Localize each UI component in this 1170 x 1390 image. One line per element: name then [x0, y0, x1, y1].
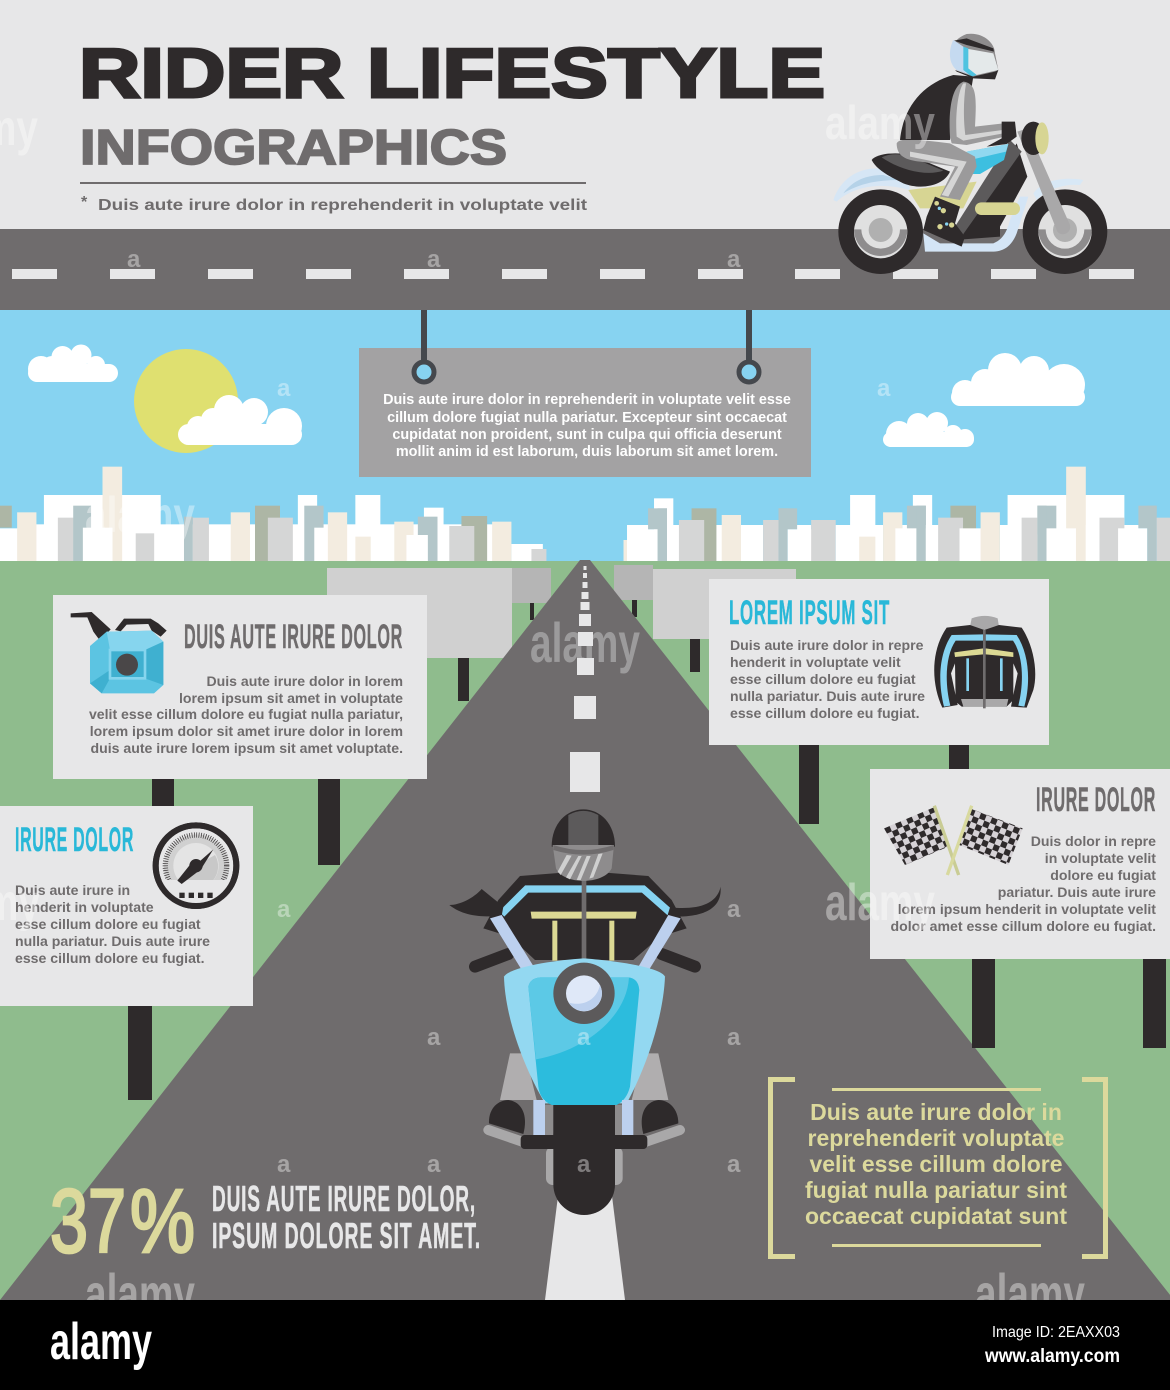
icon: side view motorcycle rider	[833, 34, 1107, 274]
header rule	[80, 182, 586, 184]
icon: cloud by sun	[178, 395, 302, 445]
post: billboard fuel	[152, 779, 340, 865]
text: gauge: esse cillum dolore eu fugiat	[15, 916, 201, 932]
stat: 37 percent: 37	[50, 1172, 126, 1272]
watermarks: a	[727, 1024, 741, 1051]
panel: fuel: DUIS AUTE IRURE DOLOR	[184, 618, 403, 656]
watermarks: a	[877, 375, 891, 402]
text: jacket: esse cillum dolore eu fugiat.	[730, 705, 920, 721]
watermarks: a	[727, 246, 741, 273]
text: flags: dolore eu fugiat	[1050, 867, 1156, 883]
city skyline right	[624, 467, 1170, 561]
watermarks: a	[427, 246, 441, 273]
title: RIDER LIFESTYLE	[79, 34, 825, 112]
watermarks: alamy	[530, 611, 640, 674]
post: billboard gauge	[128, 1006, 152, 1100]
callout: bracket quote	[770, 1080, 1106, 1256]
text: gauge: esse cillum dolore eu fugiat.	[15, 950, 205, 966]
watermarks: alamy	[975, 1262, 1085, 1325]
sky	[0, 310, 1170, 562]
text: gauge: nulla pariatur. Duis aute irure	[15, 933, 210, 949]
stat caption: IPSUM DOLORE SIT AMET.	[212, 1215, 481, 1256]
stat: 37 percent	[50, 1172, 195, 1272]
watermarks: a	[277, 1151, 291, 1178]
hanging sign: mollit anim id est laborum, duis laborum sit amet lorem.	[396, 444, 778, 460]
text: flags: lorem ipsum henderit in voluptate velit	[898, 901, 1156, 917]
hanging sign: cupidatat non proident, sunt in culpa qui officia deserunt	[392, 427, 782, 443]
callout: bracket quote: Duis aute irure dolor in	[810, 1099, 1062, 1125]
callout: bracket quote: velit esse cillum dolore	[809, 1151, 1063, 1177]
post: billboard jacket	[799, 745, 969, 824]
watermarks: a	[277, 375, 291, 402]
subtitle: INFOGRAPHICS	[80, 121, 507, 175]
stat caption: DUIS AUTE IRURE DOLOR,	[212, 1178, 476, 1219]
watermarks: a	[727, 896, 741, 923]
watermarks: a	[577, 1024, 591, 1051]
header background	[0, 0, 1170, 229]
text: flags: dolor amet esse cillum dolore eu fugiat.	[890, 918, 1156, 934]
panel: fuel	[53, 595, 427, 779]
panel: gauge: IRURE DOLOR	[15, 821, 134, 859]
callout: bracket quote: fugiat nulla pariatur sint	[805, 1177, 1067, 1203]
stat: 37 percent: %	[130, 1172, 195, 1272]
watermarks: a	[727, 1151, 741, 1178]
watermarks: alamy	[85, 487, 195, 543]
text: fuel: lorem ipsum dolor sit amet irure dolor in lorem	[90, 723, 403, 739]
icon: jacket	[934, 616, 1035, 708]
header note: *	[81, 194, 88, 211]
text: flags: Duis dolor in repre	[1031, 833, 1156, 849]
text: jacket: nulla pariatur. Duis aute irure	[730, 688, 925, 704]
footer image id: Image ID: 2EAXX03	[992, 1324, 1120, 1341]
hanging sign: Duis aute irure dolor in reprehenderit in voluptate velit esse	[383, 392, 791, 408]
callout: bracket quote: reprehenderit voluptate	[808, 1125, 1064, 1151]
watermarks: a	[427, 1024, 441, 1051]
watermarks: alamy	[825, 96, 935, 149]
watermarks: a	[577, 1151, 591, 1178]
text: fuel: Duis aute irure dolor in lorem	[206, 673, 403, 689]
text: fuel: duis aute irure lorem ipsum sit amet voluptate.	[90, 740, 403, 756]
footer url: www.alamy.com	[984, 1346, 1120, 1367]
panel: jacket	[709, 579, 1049, 745]
icon: checkered flags	[884, 806, 1023, 875]
panel: gauge	[0, 806, 253, 1006]
watermarks: a	[277, 896, 291, 923]
icon: cloud top left	[28, 344, 118, 382]
icon: cloud right small	[883, 412, 974, 447]
icon: speedometer gauge	[153, 822, 239, 909]
icon: front view motorcycle rider	[449, 809, 721, 1215]
icon: cloud right large	[951, 353, 1085, 406]
text: gauge: Duis aute irure in	[15, 882, 130, 898]
panel: racing flags	[870, 769, 1170, 959]
footer logo: alamy	[50, 1313, 152, 1371]
icon: jerry can	[71, 612, 167, 693]
callout: bracket quote: occaecat cupidatat sunt	[805, 1203, 1067, 1229]
ground	[0, 561, 1170, 1300]
text: gauge: henderit in voluptate	[15, 899, 154, 915]
icon: sun	[134, 349, 238, 453]
text: flags: in voluptate velit	[1045, 850, 1156, 866]
watermarks: alamy	[85, 1262, 195, 1325]
highway	[0, 560, 1170, 1300]
text: jacket: Duis aute irure dolor in repre	[730, 637, 924, 653]
distant billboards	[327, 565, 796, 701]
text: fuel: velit esse cillum dolore eu fugiat nulla pariatur,	[89, 706, 403, 722]
text: jacket: henderit in voluptate velit	[730, 654, 901, 670]
top road band	[0, 229, 1170, 310]
header note: Duis aute irure dolor in reprehenderit in voluptate velit	[98, 197, 588, 214]
hanging sign	[359, 310, 811, 477]
text: jacket: esse cillum dolore eu fugiat	[730, 671, 916, 687]
hanging sign: cillum dolore fugiat nulla pariatur. Excepteur sint occaecat	[387, 410, 787, 426]
city skyline left	[0, 467, 546, 561]
watermarks: a	[127, 246, 141, 273]
post: billboard flags	[972, 959, 1166, 1048]
watermarks: alamy	[825, 874, 935, 932]
watermarks: a	[427, 1151, 441, 1178]
text: fuel: lorem ipsum sit amet in voluptate	[179, 690, 403, 706]
panel: jacket: LOREM IPSUM SIT	[729, 594, 890, 632]
text: flags: pariatur. Duis aute irure	[998, 884, 1156, 900]
footer bar	[0, 1300, 1170, 1390]
